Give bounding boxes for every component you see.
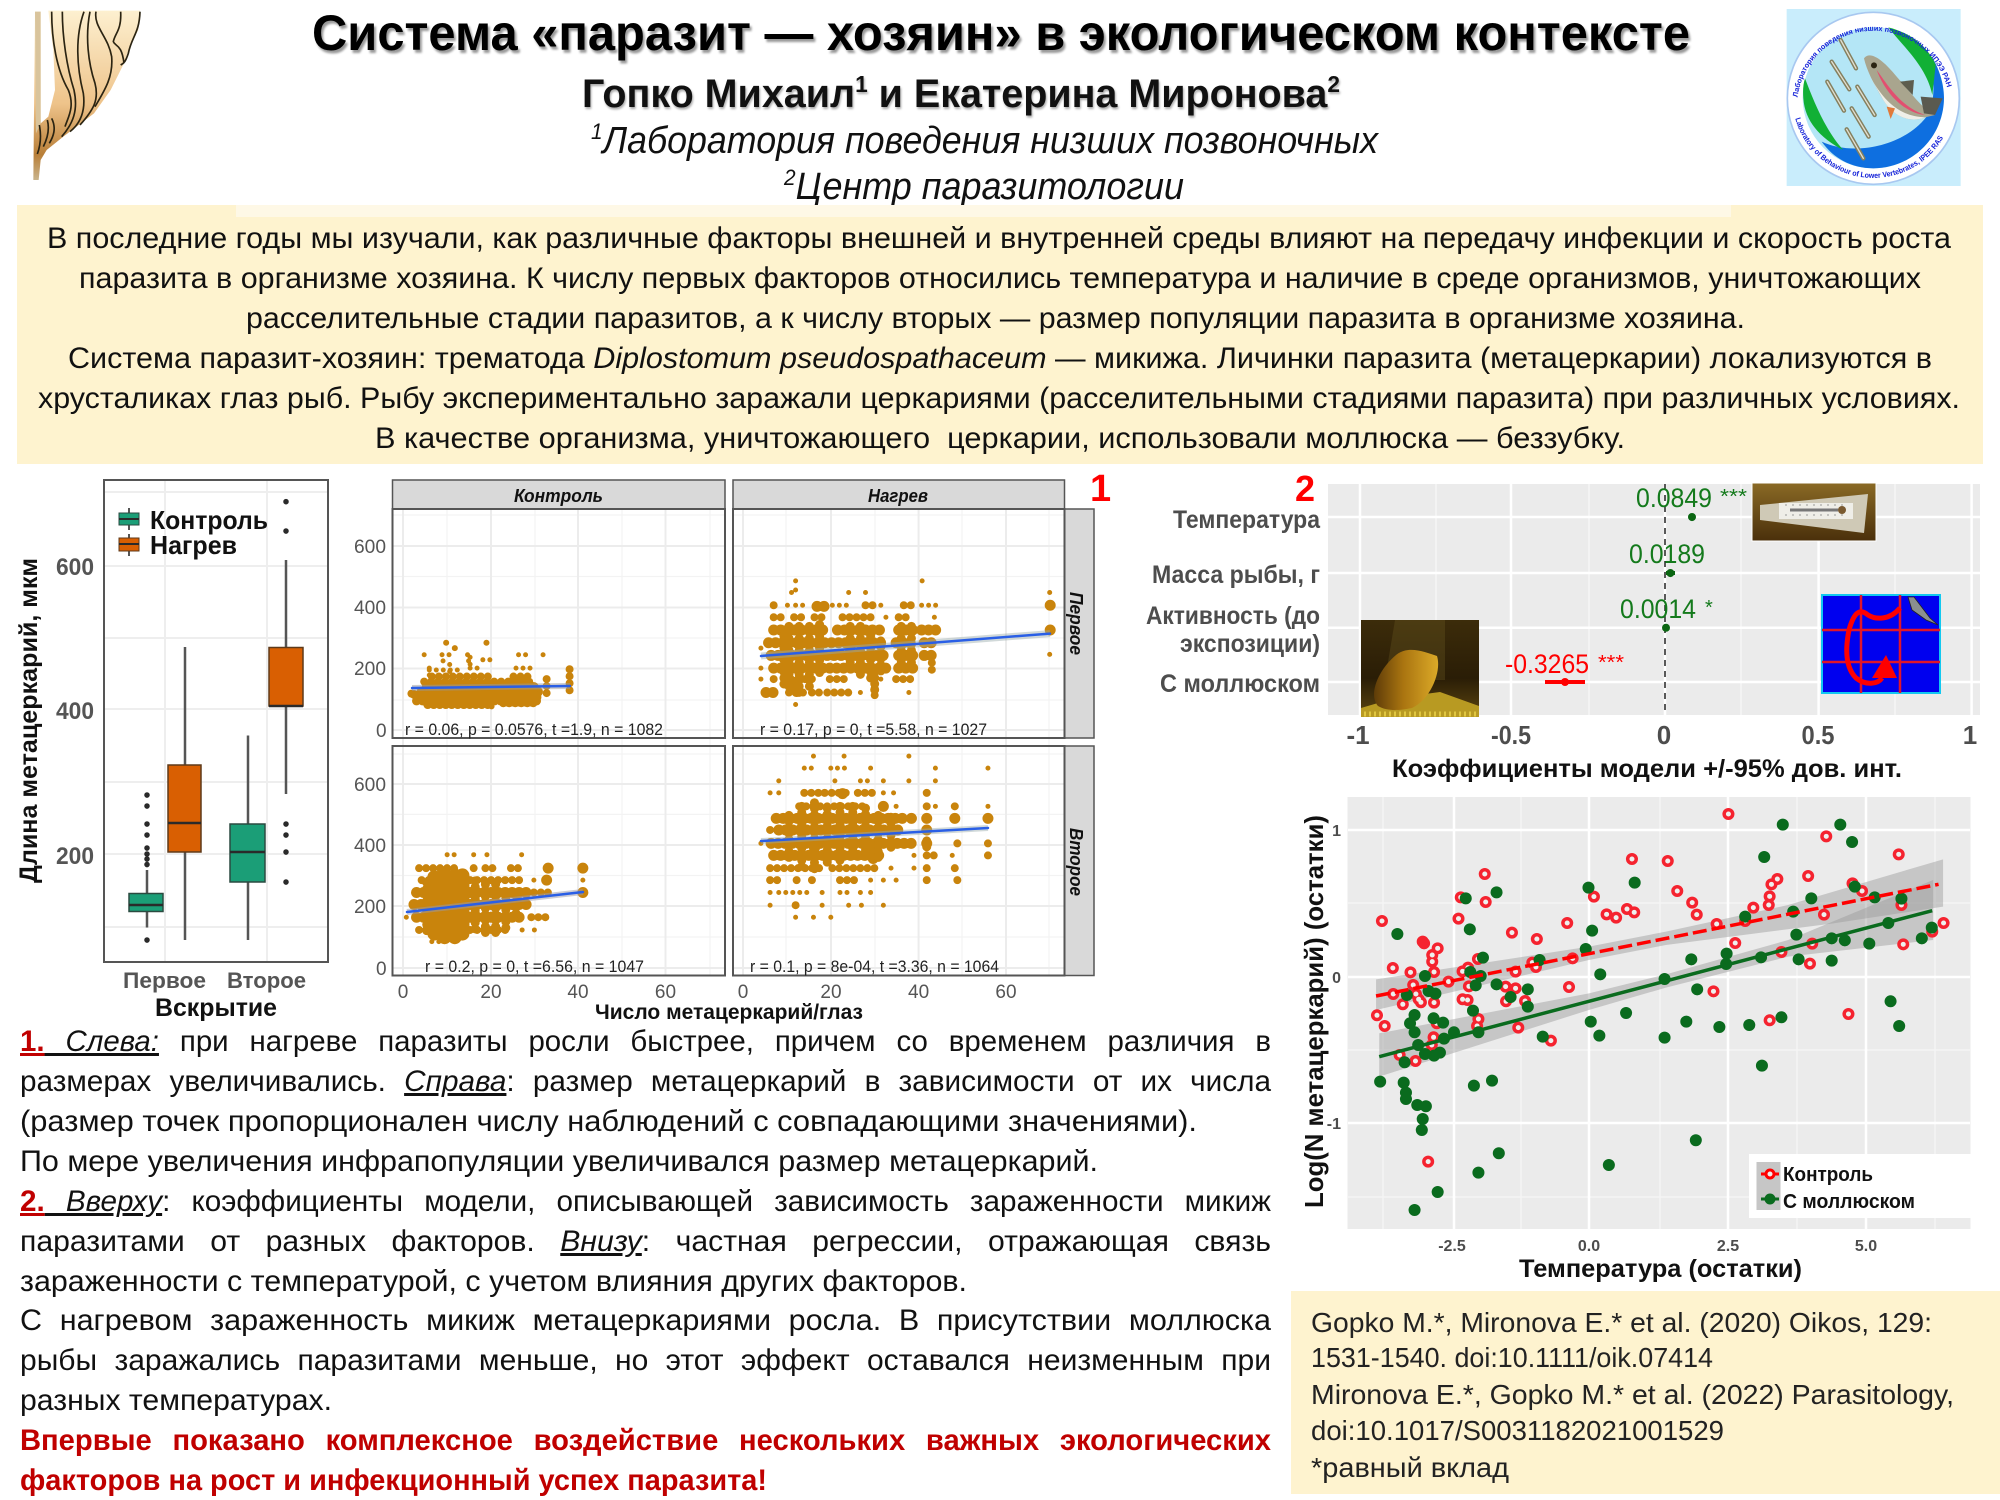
scatter: control first dissection (411, 643, 570, 706)
x tick labels: 0 (738, 982, 748, 1003)
y tick labels: 600 (354, 537, 386, 558)
text block: results description: По мере увеличения инфрапопуляции увеличивался размер метацеркарий. (20, 1145, 1098, 1178)
x tick labels (1438, 1238, 1877, 1255)
chart: boxplot of metacercaria length (15, 480, 328, 1022)
text block: results description (20, 1025, 1271, 1497)
x tick labels: 0 (398, 982, 408, 1003)
legend: Нагрев (150, 530, 237, 560)
x tick labels (398, 982, 1017, 1003)
y tick labels (354, 537, 387, 980)
facet strips top (392, 480, 1064, 509)
y tick labels: 0 (376, 721, 387, 742)
x tick labels: 5.0 (1855, 1238, 1877, 1255)
panel: references: *равный вклад (1311, 1452, 1509, 1483)
chart: partial regression infection vs temperature (1299, 797, 1971, 1283)
outliers (147, 502, 286, 940)
figure number 2: 2 (1295, 468, 1315, 509)
panel: introduction (17, 205, 1983, 464)
y tick labels: 400 (354, 598, 386, 619)
panel: references: doi:10.1017/S0031182021001529 (1311, 1415, 1724, 1446)
x axis labels: Второе (227, 968, 306, 993)
x tick labels: 2.5 (1717, 1238, 1739, 1255)
coefficient values (1505, 483, 1747, 679)
x tick labels: 60 (655, 982, 676, 1003)
regression line control (1376, 884, 1939, 996)
y axis labels: 200 (56, 843, 94, 870)
y axis title: Длина метацеркарий, мкм (15, 558, 43, 883)
y tick labels: 0 (376, 959, 387, 980)
facet strips right: Первое (1066, 592, 1086, 655)
y labels (1146, 506, 1321, 698)
x axis labels (123, 968, 306, 993)
correlation stats (405, 720, 999, 976)
y labels: С моллюском (1160, 670, 1320, 698)
facet strips top: Контроль (514, 486, 603, 506)
legend: Контроль (1783, 1164, 1873, 1186)
x tick labels: 20 (480, 982, 502, 1003)
scatter: heated second dissection (761, 756, 988, 917)
legend: Контроль (150, 505, 268, 535)
facet strips right (1064, 509, 1094, 976)
authors: и Екатерина Миронова (868, 72, 1328, 116)
whiskers (147, 560, 286, 940)
y tick labels: 1 (1332, 823, 1341, 840)
panel: references: Gopko M.*, Mironova E.* et al. (2020) Oikos, 129: (1311, 1307, 1932, 1338)
coefficient values: -0.3265 (1505, 649, 1589, 679)
y tick labels (1327, 823, 1341, 1133)
y tick labels: -1 (1327, 1116, 1341, 1133)
scatter: heated first dissection (761, 581, 1050, 705)
intro text: расселительные стадии паразитов, а к числу вторых — размер популяции паразита в организме хозяина. (246, 302, 1745, 335)
y axis labels: 400 (56, 698, 94, 725)
text block: results description: разных температурах. (20, 1384, 332, 1417)
confidence band with mollusc (1379, 880, 1933, 1077)
medians (129, 706, 303, 905)
icon: laboratory round logo (1786, 9, 1961, 186)
photo: thermometer (1752, 483, 1876, 541)
affiliation 2: 2 (783, 165, 796, 190)
chart: faceted scatterplots of size vs number (354, 480, 1094, 1024)
intro text: паразита в организме хозяина. К числу первых факторов относились температура и наличие в среде организмов, уничтожающих (79, 262, 1921, 295)
boxes heated (168, 648, 303, 852)
intro text: В качестве организма, уничтожающего церкарии, использовали моллюска — беззубку. (375, 422, 1625, 455)
facet strips right: Второе (1066, 828, 1086, 896)
x tick labels (1346, 720, 1977, 750)
coefficient values: * (1705, 597, 1713, 619)
trend line heated first (761, 634, 1050, 656)
affiliation 1: 1 (591, 119, 603, 144)
intro text (38, 222, 1960, 455)
ring text top: Лаборатория поведения низших позвоночных ИПЭЭ РАН (1792, 26, 1952, 98)
control points (1377, 814, 1944, 1162)
y tick labels: 600 (354, 775, 386, 796)
intro text: В последние годы мы изучали, как различные факторы внешней и внутренней среды влияют на передачу инфекции и скорость роста (47, 222, 1951, 255)
icon: small fish school (1827, 40, 1875, 158)
coefficient values: 0.0189 (1629, 539, 1705, 569)
trend line control second (407, 892, 583, 912)
coefficient values: *** (1720, 486, 1747, 508)
authors: 2 (1327, 71, 1340, 97)
text block: results description: зараженности с температурой, с учетом влияния других факторов. (20, 1265, 967, 1298)
scatter: control second dissection (406, 855, 583, 942)
coefficient values: 0.0849 (1636, 483, 1712, 513)
trend line heated second (761, 828, 988, 841)
correlation stats: r = 0.17, p = 0, t =5.58, n = 1027 (760, 720, 987, 739)
y labels: Температура (1173, 506, 1321, 534)
coefficient values: *** (1598, 652, 1624, 674)
authors: Гопко Михаил (582, 72, 859, 116)
y tick labels: 400 (354, 836, 386, 857)
correlation stats: r = 0.1, p = 8e-04, t =3.36, n = 1064 (750, 957, 999, 976)
y labels: Активность (до (1146, 602, 1320, 630)
x tick labels: 1 (1963, 720, 1977, 750)
x tick labels: 40 (908, 982, 929, 1003)
text block: results description: 1. Слева: при нагреве паразиты росли быстрее, причем со временем различия в (20, 1025, 1271, 1058)
x axis title: Число метацеркарий/глаз (595, 1001, 863, 1024)
y axis labels (56, 554, 94, 870)
legend (1749, 1154, 1971, 1218)
confidence band control (1376, 859, 1943, 1010)
text block: results description: размерах увеличивались. Справа: размер метацеркарий в зависимости от их числа (20, 1065, 1271, 1098)
x tick labels: -1 (1346, 720, 1370, 750)
icon: curtain-shaped left logo (33, 11, 140, 180)
conclusion: факторов на рост и инфекционный успех паразита! (20, 1464, 767, 1497)
x tick labels: 20 (820, 982, 842, 1003)
with mollusc points (1380, 825, 1932, 1210)
correlation stats: r = 0.06, p = 0.0576, t =1.9, n = 1082 (405, 720, 663, 739)
panel: references (1291, 1291, 2000, 1494)
y labels: экспозиции) (1180, 630, 1320, 658)
x tick labels: -0.5 (1491, 720, 1531, 750)
intro text: хрусталиках глаз рыб. Рыбу экспериментально заражали церкариями (расселительными стадиями паразита) при различных условиях. (38, 382, 1960, 415)
coefficient values: 0.0014 (1620, 594, 1696, 624)
affiliation 2: Центр паразитологии (796, 166, 1184, 208)
coefficient points (1545, 517, 1692, 686)
y tick labels: 200 (354, 659, 386, 680)
icon: fish tracking maze (1822, 595, 1940, 693)
y axis title: Log(N метацеркарий) (остатки) (1299, 815, 1329, 1208)
panel: references: 1531-1540. doi:10.1111/oik.07414 (1311, 1342, 1713, 1373)
intro text: Система паразит-хозяин: трематода Diplostomum pseudospathaceum — микижа. Личинки паразита (метацеркарии) локализуются в (68, 342, 1932, 375)
text block: results description: С нагревом зараженность микиж метацеркариями росла. В присутствии моллюска (20, 1304, 1271, 1337)
boxes control (129, 824, 265, 912)
y labels: Масса рыбы, г (1152, 561, 1320, 589)
ring text bottom: Laboratory of Behaviour of Lower Vertebrates, IPEE RAS (1795, 117, 1943, 178)
y tick labels: 0 (1332, 970, 1341, 987)
x tick labels: 0.0 (1578, 1238, 1600, 1255)
correlation stats: r = 0.2, p = 0, t =6.56, n = 1047 (425, 957, 644, 976)
text block: results description: паразитами от разных факторов. Внизу: частная регрессии, отражающая связь (20, 1225, 1271, 1258)
x tick labels: 0 (1657, 720, 1671, 750)
x axis labels: Первое (123, 968, 206, 993)
x axis title: Температура (остатки) (1519, 1255, 1802, 1283)
y tick labels: 200 (354, 897, 386, 918)
legend (119, 505, 268, 560)
panel: references: Mironova E.*, Gopko M.* et al. (2022) Parasitology, (1311, 1379, 1954, 1410)
text block: results description: 2. Вверху: коэффициенты модели, описывающей зависимость зараженности микиж (20, 1185, 1271, 1218)
x tick labels: 0.5 (1802, 720, 1834, 750)
title: Система «паразит — хозяин» в экологическом контексте (312, 5, 1690, 61)
affiliation 1: Лаборатория поведения низших позвоночных (600, 120, 1380, 162)
chart: model coefficients (1146, 483, 1980, 783)
x tick labels: -2.5 (1438, 1238, 1466, 1255)
conclusion: Впервые показано комплексное воздействие нескольких важных экологических (20, 1424, 1271, 1457)
legend: С моллюском (1783, 1191, 1915, 1213)
icon: salmon (1864, 55, 1943, 119)
x axis title: Коэффициенты модели +/-95% дов. инт. (1392, 755, 1902, 783)
facet strips top: Нагрев (868, 486, 928, 506)
regression line with mollusc (1379, 911, 1932, 1057)
authors: 1 (855, 71, 868, 97)
trend line control first (412, 686, 570, 688)
x axis title: Вскрытие (155, 994, 277, 1022)
text block: results description: (размер точек пропорционален числу наблюдений с совпадающими значениями). (20, 1105, 1197, 1138)
y axis labels: 600 (56, 554, 94, 581)
panel backgrounds (392, 509, 1064, 976)
x tick labels: 60 (995, 982, 1017, 1003)
photo: mollusc (1361, 620, 1479, 717)
conclusion (20, 1424, 1271, 1497)
figure number 1: 1 (1090, 468, 1111, 510)
header: title block (312, 5, 1690, 208)
text block: results description: рыбы заражались паразитами меньше, но этот эффект оставался неизменным при (20, 1344, 1271, 1377)
x tick labels: 40 (567, 982, 589, 1003)
panel borders (392, 509, 1064, 976)
